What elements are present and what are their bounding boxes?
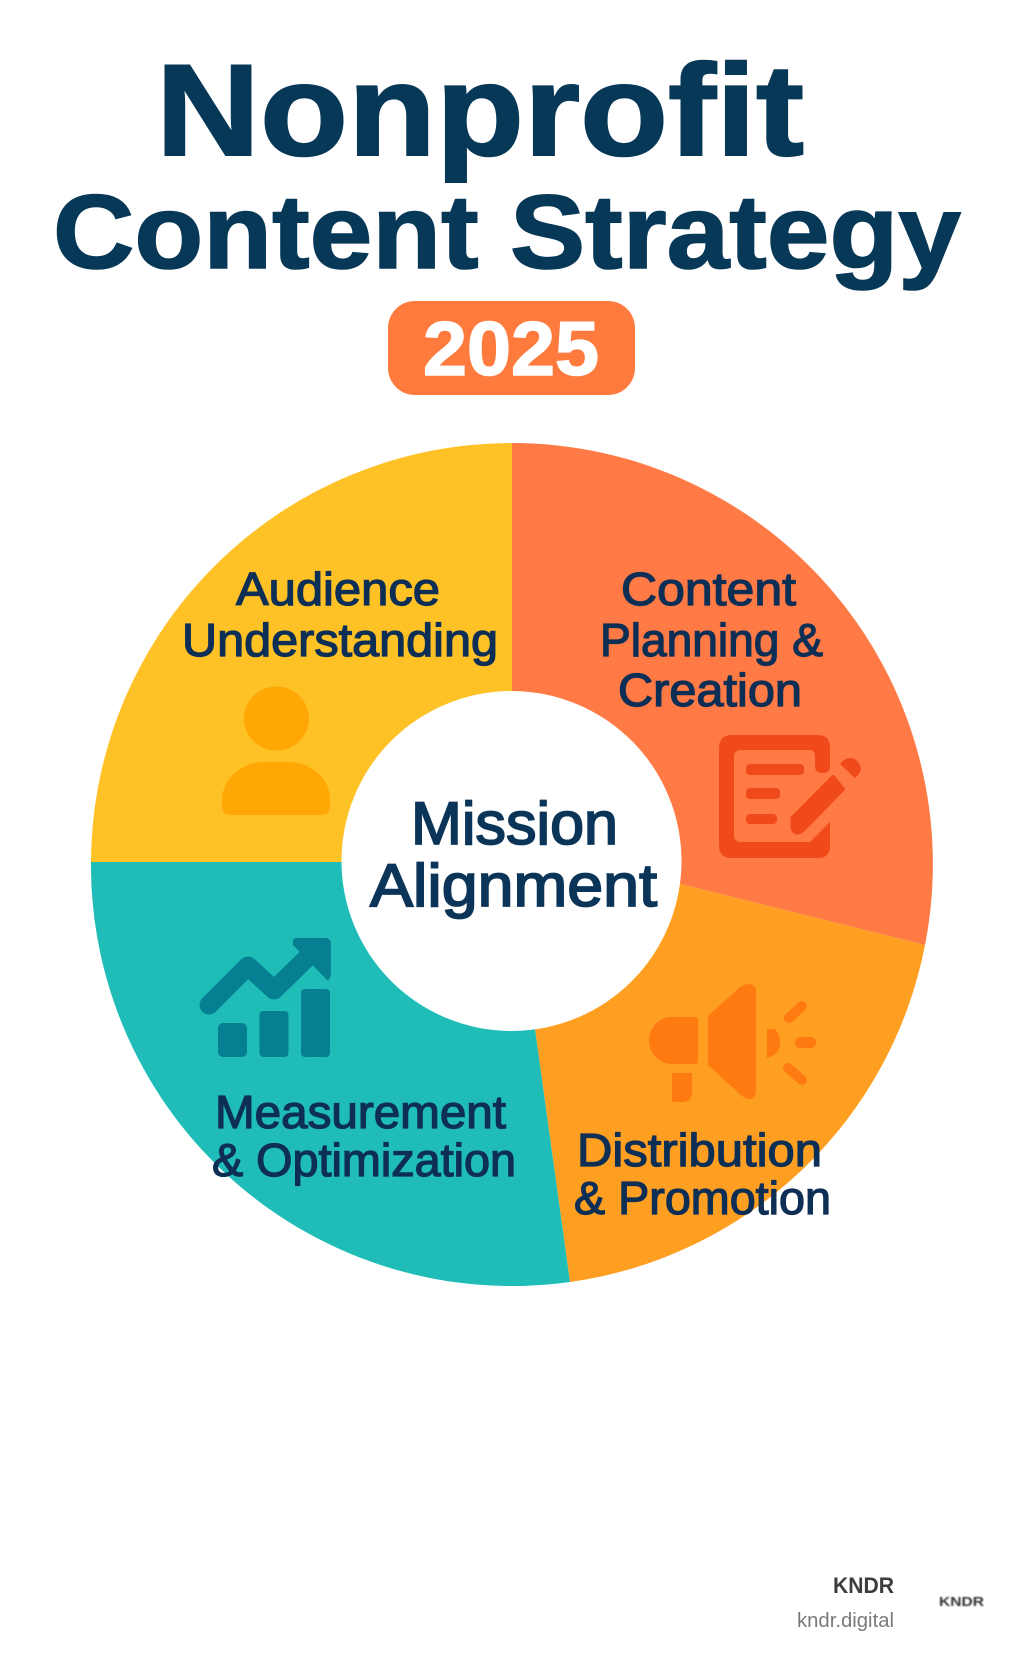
label: content planning and creation: Planning & <box>600 614 823 666</box>
center label: Alignment <box>370 852 657 919</box>
year badge: 2025 <box>423 307 599 392</box>
center label <box>370 790 657 919</box>
donut chart <box>91 443 933 1286</box>
segment: audience understanding <box>91 443 512 862</box>
label: distribution and promotion <box>574 1124 831 1224</box>
label: content planning and creation: Content <box>621 563 796 615</box>
title: Content Strategy <box>53 174 961 291</box>
label: content planning and creation <box>600 563 823 716</box>
year badge <box>388 301 635 395</box>
icon: growth chart <box>209 938 331 1057</box>
icon: document with pencil <box>719 735 861 858</box>
footer brand text: kndr.digital <box>797 1610 894 1632</box>
label: measurement and optimization: & Optimization <box>212 1134 516 1186</box>
center label: Mission <box>411 790 618 857</box>
label: measurement and optimization <box>212 1086 516 1186</box>
label: audience understanding <box>182 563 498 666</box>
icon: megaphone <box>649 984 816 1102</box>
segment: distribution and promotion <box>512 842 925 1282</box>
label: content planning and creation: Creation <box>618 664 802 716</box>
footer brand text: KNDR <box>833 1573 894 1598</box>
icon: person <box>222 686 330 815</box>
center circle <box>342 691 682 1031</box>
title <box>53 37 961 291</box>
footer small logo: KNDR <box>939 1594 985 1609</box>
label: measurement and optimization: Measurement <box>215 1086 506 1138</box>
title: Nonprofit <box>156 37 804 183</box>
label: distribution and promotion: & Promotion <box>574 1172 831 1224</box>
label: audience understanding: Audience <box>236 563 440 615</box>
segment: measurement and optimization <box>91 862 570 1286</box>
label: distribution and promotion: Distribution <box>577 1124 822 1176</box>
segment: content planning and creation <box>512 443 933 945</box>
footer brand text <box>797 1573 894 1632</box>
label: audience understanding: Understanding <box>182 614 498 666</box>
